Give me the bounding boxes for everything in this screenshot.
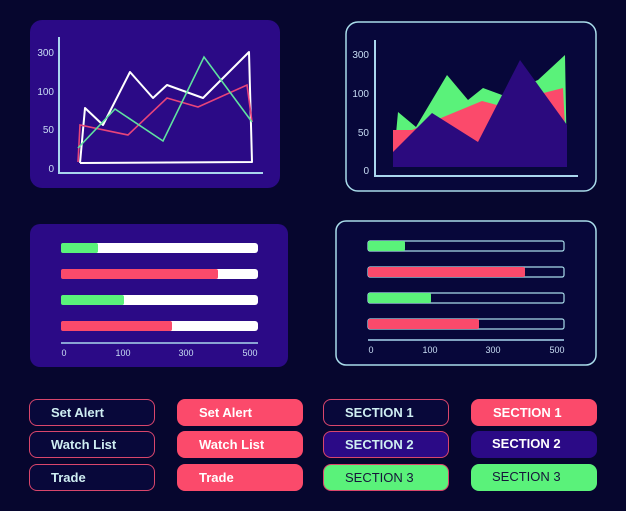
- panel: line chart: [30, 20, 280, 188]
- panel: area chart: 300: [352, 50, 369, 61]
- panel: line chart: 300: [37, 48, 54, 59]
- panel: line chart: 50: [43, 125, 54, 136]
- panel: bars left: [30, 224, 288, 367]
- button: section 1 filled: [471, 399, 597, 426]
- panel: line chart: 100: [37, 87, 54, 98]
- panel: bars left: 100: [115, 348, 131, 358]
- panel: bars left: 300: [178, 348, 194, 358]
- panel: bars right: [336, 221, 596, 365]
- button: section 3 outline: SECTION 3: [345, 470, 414, 485]
- panel: bars right: 100: [422, 345, 438, 355]
- button: section 1 outline: [323, 399, 449, 426]
- panel: area chart: 100: [352, 89, 369, 100]
- button: section 2 outline: [323, 431, 449, 458]
- button: section 3 filled: [471, 464, 597, 491]
- panel: bars left: 0: [61, 348, 67, 358]
- button: set alert pink: Set Alert: [199, 405, 252, 420]
- panel: area chart: 0: [363, 166, 369, 177]
- button: section 2 outline: SECTION 2: [345, 437, 414, 452]
- button: watch list pink: [177, 431, 303, 458]
- button: section 2 filled: SECTION 2: [492, 436, 561, 451]
- button: set alert pink: [177, 399, 303, 426]
- panel: line chart: 0: [48, 164, 54, 175]
- panel: bars right: 500: [549, 345, 565, 355]
- panel: bars left: 500: [242, 348, 258, 358]
- button: set alert outline: Set Alert: [51, 405, 104, 420]
- panel: area chart: [346, 22, 596, 191]
- button: trade outline: Trade: [51, 470, 86, 485]
- button: trade pink: Trade: [199, 470, 234, 485]
- button: watch list outline: [29, 431, 155, 458]
- button: set alert outline: [29, 399, 155, 426]
- panel: area chart: 50: [358, 128, 369, 139]
- button: section 1 outline: SECTION 1: [345, 405, 414, 420]
- button: section 1 filled: SECTION 1: [493, 405, 562, 420]
- button: watch list outline: Watch List: [51, 437, 116, 452]
- panel: bars right: 300: [485, 345, 501, 355]
- button: watch list pink: Watch List: [199, 437, 264, 452]
- button: section 2 filled: [471, 431, 597, 458]
- button: trade outline: [29, 464, 155, 491]
- button: trade pink: [177, 464, 303, 491]
- button: section 3 outline: [323, 464, 449, 491]
- button: section 3 filled: SECTION 3: [492, 469, 561, 484]
- panel: bars right: 0: [368, 345, 374, 355]
